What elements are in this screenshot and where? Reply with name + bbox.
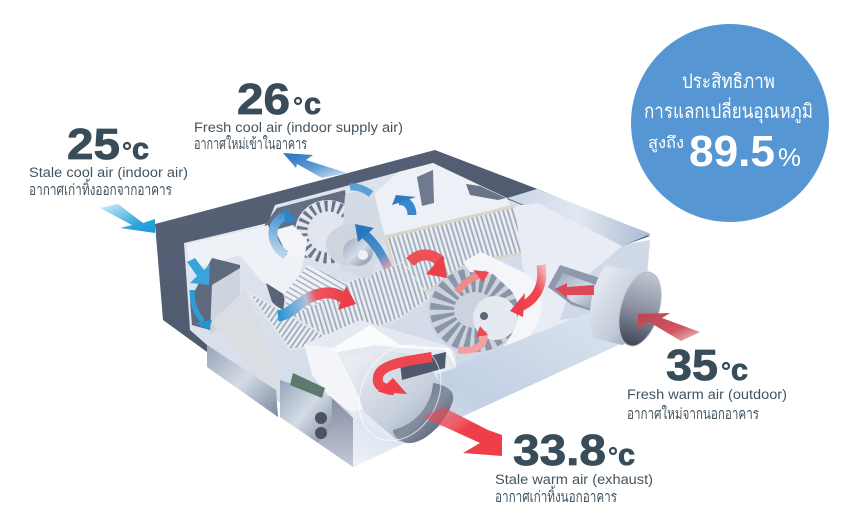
- right collar: [590, 265, 650, 345]
- bracket: [340, 187, 385, 280]
- label: 25 °C stale cool air: 25: [67, 120, 120, 169]
- internal air flow arrows: [187, 187, 594, 394]
- heat exchanger lower: [285, 262, 430, 350]
- label: 26 °C fresh cool air: อากาศใหม่เข้าในอาคาร: [194, 135, 307, 153]
- label: 35 °C fresh warm air: c: [731, 352, 748, 387]
- label: 33.8 °C stale warm air: 33.8: [513, 426, 606, 475]
- front duct housing: [305, 320, 456, 442]
- left front panel: [207, 345, 278, 417]
- white duct lip: [330, 325, 457, 368]
- box face: [280, 380, 332, 443]
- callout: heat exchange efficiency: การแลกเปลี่ยนอุณหภูมิ: [644, 97, 813, 124]
- right section wall: [515, 203, 622, 345]
- motor housing: [326, 224, 374, 266]
- arrow: stale cool air in: [100, 204, 155, 233]
- arrow: left blue upper: [187, 258, 210, 285]
- motor core: [343, 238, 373, 266]
- corner piece: [318, 397, 353, 467]
- label: 26 °C fresh cool air: [194, 75, 403, 153]
- machine: cutaway ventilation unit: [155, 150, 669, 467]
- arrow: fresh cool air out: [283, 153, 347, 178]
- left dark box: [190, 258, 240, 330]
- right rectangular duct opening: [548, 265, 612, 316]
- callout: heat exchange efficiency: [631, 24, 829, 222]
- fan bolt: [480, 312, 488, 320]
- arrow: top blue small: [350, 187, 371, 194]
- arrow: fresh warm air in: [638, 313, 700, 341]
- top right dark slot: [466, 184, 506, 200]
- label: 26 °C fresh cool air: 26: [237, 75, 290, 124]
- front duct dark opening: [400, 352, 446, 380]
- foam block: [304, 344, 365, 412]
- scroll duct block by left fan: [275, 225, 307, 255]
- arrow: stale warm air out: [423, 407, 502, 456]
- fan blades: [302, 206, 354, 258]
- callout: heat exchange efficiency: %: [778, 144, 801, 172]
- label: 33.8 °C stale warm air: อากาศเก่าทิ้งนอกอาคาร: [495, 485, 617, 506]
- left box panel: [210, 268, 240, 335]
- dark gap by exchanger: [266, 283, 285, 312]
- arrow: motor blue: [355, 224, 388, 268]
- fan disc: [428, 267, 522, 353]
- right wall panel: [352, 313, 625, 467]
- circuit board: [290, 373, 325, 398]
- label: 33.8 °C stale warm air: c: [618, 437, 635, 472]
- callout: heat exchange efficiency: ประสิทธิภาพ: [682, 71, 775, 93]
- callout: heat exchange efficiency: สูงถึง: [648, 135, 684, 153]
- heat exchanger lower left: [247, 291, 335, 350]
- label: 25 °C stale cool air: c: [132, 131, 149, 166]
- motor shaft: [358, 250, 368, 260]
- arrow: chamber blue curl: [273, 208, 297, 255]
- right fan scroll casing: [463, 252, 542, 352]
- heat exchanger upper: [385, 206, 538, 298]
- right opening inner: [555, 273, 604, 312]
- fin panel beside motor: [283, 265, 350, 312]
- arrow: fan bottom red: [458, 326, 488, 350]
- knob 1: [315, 412, 327, 424]
- callout: heat exchange efficiency: 89.5: [689, 127, 775, 176]
- housing interior base: [184, 163, 650, 467]
- left compartment white wedge: [187, 225, 305, 295]
- arrow: scroll red curve: [510, 265, 542, 317]
- label: 25 °C stale cool air: [29, 120, 188, 199]
- front duct dark pipe: [393, 383, 453, 443]
- fan backing: [295, 200, 361, 264]
- left fan motor and bracket: [326, 187, 385, 280]
- label: 25 °C stale cool air: Stale cool air (indoor air): [29, 165, 188, 180]
- right duct end ring: [611, 267, 669, 351]
- arrow: exchanger blue to red: [278, 286, 356, 316]
- dark rear chamber: [264, 190, 350, 258]
- left fan: [295, 200, 361, 264]
- knob 2: [315, 427, 327, 439]
- fan blades: [442, 280, 508, 340]
- arrow: duct inlet red: [555, 283, 594, 298]
- fan hub: [473, 296, 517, 340]
- label: 35 °C fresh warm air: อากาศใหม่จากนอกอาคาร: [627, 405, 759, 423]
- label: 33.8 °C stale warm air: Stale warm air (exhaust): [495, 472, 653, 487]
- label: 35 °C fresh warm air: Fresh warm air (outdoor): [627, 387, 787, 402]
- label: 35 °C fresh warm air: 35: [666, 341, 718, 390]
- front duct rim outline: [343, 331, 457, 455]
- arrow: upper exchanger red: [410, 255, 447, 278]
- top right dark recess: [417, 170, 434, 206]
- arrow: fan top red: [457, 270, 489, 292]
- label: 25 °C stale cool air: อากาศเก่าทิ้งออกจากอาคาร: [29, 178, 172, 199]
- label: 35 °C fresh warm air: [627, 341, 787, 423]
- label: 26 °C fresh cool air: c: [304, 86, 321, 121]
- label: 26 °C fresh cool air: Fresh cool air (indoor supply air): [194, 120, 403, 135]
- top flange right: [507, 189, 651, 246]
- right fan: [428, 267, 522, 353]
- front duct body: [345, 351, 446, 442]
- arrow: top right blue: [392, 195, 416, 215]
- triangular filter panel: [211, 290, 280, 395]
- arrow: left blue lower: [192, 290, 212, 330]
- label: 33.8 °C stale warm air: [495, 426, 653, 506]
- top right compartment: [372, 163, 510, 237]
- dark rear and left wall: [155, 150, 650, 352]
- control box: [280, 373, 332, 443]
- arrow: duct curl red: [378, 357, 432, 394]
